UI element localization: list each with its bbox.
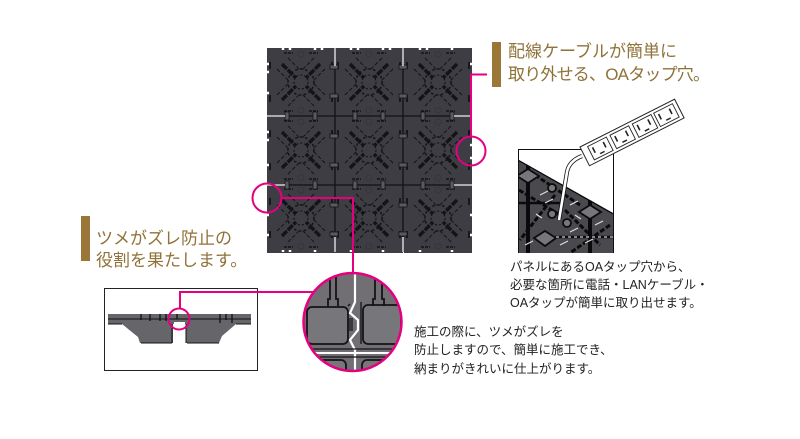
heading: claw: ツメがズレ防止の [96,229,232,248]
heading bar: claw [81,216,90,261]
callout line: claw detail [252,184,353,273]
icon: cable [559,156,582,220]
magnified circle: claw joint [302,272,403,372]
text block: claw description: 施工の際に、ツメがズレを [414,324,564,339]
heading bar: OA tap [492,42,501,87]
callout line: OA tap hole [456,74,487,166]
icon: power strip [580,99,684,166]
heading: claw: 役割を果たします。 [96,251,247,270]
callout line: section to magnifier [168,292,314,330]
text block: claw description: 防止しますので、簡単に施工でき、 [414,342,613,357]
text block: OA tap description: パネルにあるOAタップ穴から、 [510,260,691,274]
text block: claw description: 納まりがきれいに仕上がります。 [414,361,600,376]
heading: OA tap: 取り外せる、OAタップ穴。 [508,65,710,84]
heading: OA tap: 配線ケーブルが簡単に [508,41,677,61]
text block: OA tap description: 必要な箇所に電話・LANケーブル・ [510,277,709,292]
panel: floor panel photo [267,48,472,253]
text block: OA tap description: OAタップが簡単に取り出せます。 [510,295,702,310]
illustration: cross-section box [104,288,258,370]
illustration: panel with power strip [517,99,684,254]
